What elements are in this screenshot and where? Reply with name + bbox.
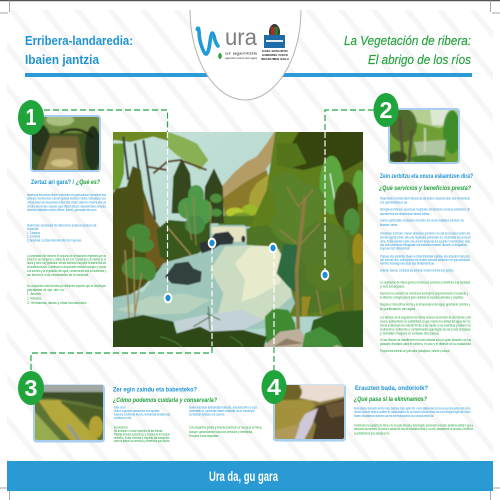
panel 1 body text: Spanish: fauna y flora muy particular, siendo además una parte fundamental del — [27, 261, 106, 265]
panel 1 body text: Spanish: 3. Herbáceas, lianas y otras formaciones. — [27, 301, 87, 305]
panel 2 body text: Spanish: Actúa como barrera natural frente a las riadas y las avenidas y retiene los — [380, 324, 471, 328]
panel 2 body text: Spanish: La vegetación de ribera genera numerosos servicios y beneficios a la sociedad — [380, 280, 470, 284]
left dark tree mass — [110, 166, 167, 303]
panel 1 body text: Spanish: Su composición está formada por diferentes especies que se distribuyen — [27, 284, 106, 288]
panel 2 body text: Basque: ere garrantzitsua da. — [380, 200, 408, 204]
title: Spanish: La Vegetación de ribera: — [344, 33, 471, 48]
panel 2 body text: Spanish: Los efectos de la vegetación de ribera reducen la erosión de las riberas y del — [380, 316, 471, 320]
panel 1 body text: Basque: Ibaiertzeko landaredia hiru faktoreren arabera banatzen da: — [27, 224, 97, 228]
panel 3 heading: ¿Cómo podemos cuidarla y conservarla? — [113, 397, 217, 404]
step badge 1: 1 — [26, 104, 37, 130]
left front tree — [122, 224, 156, 281]
river water — [110, 225, 295, 333]
panel 2 body text: Basque: eta bizidunentzat elikagaiak eta babesa ematen dituzte ur-ibilguetan. — [380, 243, 468, 247]
photo 3: aerial river valley — [33, 383, 105, 443]
panel 1 body text: Basque: 1. Zuhaitzak — [27, 231, 40, 235]
footer band — [7, 461, 493, 491]
icon: government shield: INGURUMEN SAILA — [261, 57, 289, 61]
panel 2 body text: Basque: dute, itzala ematen dute eta uraren tenperatura egonkor mantentzen dute, — [380, 240, 471, 244]
panel 1 heading: ¿Qué es? — [76, 179, 100, 186]
panel 3 body text: left column: Ibaien inguruko landaredia errespetatu. — [114, 409, 160, 413]
panel 4 body text — [354, 406, 473, 436]
panel 2 body text: Basque: Ibaiertzeko landaredia funtsezkoa da ibaien osasunerako eta herrientzat — [380, 196, 470, 200]
step badge 1 — [18, 100, 44, 135]
panel 2 body text: Spanish — [380, 280, 471, 353]
panel 2 body text: Basque: Uholdeen kontrola: uraren abiadura gutxitzen du eta lurzoruari eusten dio, — [380, 232, 471, 236]
panel 1 body text: Spanish: así favorece a las necesidades de la sociedad. — [27, 273, 89, 277]
logo panel — [190, 10, 301, 100]
panel 1 body text: Basque: bizitzeko habitatak sortzen dituzte, ibarrei, gainazalari eta urari. — [27, 208, 97, 212]
panel 3 heading: Zer egin zaindu eta babesteko? — [113, 388, 197, 394]
right forest — [250, 130, 367, 317]
panel 2 body text: Basque: inguruan bizi direnentzat. — [380, 246, 410, 250]
panel 3 body text: right column: Ibaien ertzetan landaredia babestu, kutsadurarik ez egin, — [189, 406, 258, 410]
connector 1 — [44, 110, 172, 304]
panel 3 body text: left column — [114, 406, 170, 443]
panel 3 body text: left column: Recomendaciones: — [114, 426, 128, 430]
title: Spanish — [344, 33, 471, 67]
header rule lines — [25, 73, 472, 77]
panel 1 body text: Basque: 2. Zuhaixkak — [27, 234, 40, 238]
panel 3 body text: right column — [189, 406, 262, 438]
panel 3 heading — [113, 388, 217, 404]
marker dot 4 — [269, 242, 277, 254]
panel 3 body text: left column: ribereño. Evitar vertidos y respetar las márgenes, — [114, 436, 170, 440]
panel 4 heading: Erauzten bada, ondorioik? — [355, 385, 428, 392]
connector 2 — [321, 110, 374, 280]
logo tagline: agencia vasca del agua — [225, 56, 257, 60]
icon: ura water squiggle — [196, 26, 218, 54]
panel 2 body text: Basque: Paisaia eta aisialdia: ibaien ertzak ibilaldiak egiteko eta atseden hartzeko — [380, 254, 470, 258]
middle green tree — [178, 185, 213, 234]
step badge 2: 2 — [380, 97, 392, 123]
panel 3 body text: left column: Espezie exotikoak kendu, bertakoak landatu eta — [114, 412, 170, 416]
panel 4 heading: ¿Qué pasa si la eliminamos? — [354, 396, 427, 403]
panel 2 body text: Spanish: cauce, aumentando su estabilidad, lo que mejora la calidad del agua del río. — [380, 320, 471, 324]
panel 1 body text: Spanish: 1. Árboles — [27, 292, 41, 296]
panel 2 body text: Basque: ertzak egonkortzen ditu eta higadura saihesten du. Sustraiek lurra lotzen — [380, 236, 471, 240]
marker dot 2 — [321, 270, 329, 280]
panel 2 body text: Spanish: paisajes fluviales para el turismo, el ocio y el disfrute de la ciudadanía — [380, 342, 471, 346]
far hills — [222, 130, 277, 202]
panel 3 body text: left column: para no alterar los servicios y beneficios que aporta. — [114, 439, 170, 443]
title: Basque: Erribera-landaredia: — [25, 33, 133, 48]
panel 4 heading — [354, 385, 428, 403]
panel 3 body text: right column: bosque, garantizando todos los servicios y beneficios. — [189, 430, 253, 434]
photo 4: eroded riverbank — [272, 382, 347, 443]
marker dot 3 — [208, 238, 216, 248]
panel 2 body text: Spanish: Proporciona además un gran valor paisajístico, natural y cultural. — [380, 349, 450, 353]
panel 3 body text: left column: Ibaiak zaindu: — [114, 406, 126, 410]
panel 2 body text: Basque: faunarentzat eta florarentzat hainbat tokitan. — [380, 212, 430, 216]
lime bushes — [218, 204, 258, 228]
panel 2 body text: Spanish: y los bosques: — [380, 284, 405, 288]
photo 2: riverside trees — [388, 108, 461, 164]
panel 2 body text: Basque: Azkenik, basoak, zuhaitzak eta belarrak ondare komuna dira guztion. — [380, 268, 454, 272]
panel 1 body text: Basque: ondare baten eta ekosistema baten dira. Ibaien sistemen oinarria dira eta — [27, 200, 106, 204]
panel 2 heading — [379, 174, 473, 192]
panel 1 body text: Spanish: La vegetación de ribera es el conjunto de formaciones vegetales que se — [27, 254, 106, 258]
step badge 4 — [262, 370, 286, 404]
panel 1 body text: Spanish: paralelas al eje del río: — [27, 288, 65, 292]
big central tree — [247, 225, 353, 317]
cypress trees — [172, 158, 193, 213]
foreground right bushes — [310, 310, 363, 347]
panel 1 body text: Basque: espeziak: — [27, 227, 39, 231]
panel 1 heading: Zertaz ari gara? / — [31, 179, 74, 186]
panel 4 body text: ecosistémicos que presta el río. — [354, 432, 390, 436]
icon: government shield — [261, 24, 289, 61]
panel 2 body text: Spanish: Favorece la conexión de corredores ecológicos proporcionando el sustento y — [380, 292, 468, 296]
panel 2 body text: Spanish: Si las riberas se mantienen en buen estado son un gran atractivo de los — [380, 338, 471, 342]
panel 3 body text: right column: Con pequeños gestos y buenas prácticas se recupera la ribera, — [189, 426, 262, 430]
panel 1 body text: Basque: uretako eta lurreko espezie ugari biltzen dituzte. Basoak babes emanez — [27, 204, 106, 208]
panel 1 body text: Basque: zeinetan, ibai ibarrean, basoen guneak hedatzen baitira. Eskualdean oso — [27, 197, 106, 201]
panel 1 body text: Spanish: a la sombra y la regulación del agua, conservando sus ecosistemas y — [27, 269, 106, 273]
panel 1 body text: Basque: Ibaiertzak eskuinean ibaien inskribako eta gainazaleko lurraldeak dira — [27, 193, 106, 197]
marker dot 1 — [164, 292, 172, 304]
panel 2 body text: Spanish: sedimentos, nutrientes y contaminantes que llegan de las zonas cercanas. — [380, 328, 471, 332]
title: Basque — [25, 33, 133, 67]
panel 2 body text: Spanish: Regula el microclima del río y la temperatura del agua, aportando sombra y — [380, 302, 470, 306]
panel 2 body text: Basque: toki ederrak dira, baita kultura eta ondare naturala zaintzeko ere garrantzitsuak — [380, 258, 470, 262]
panel 2 body text: Basque: ibaietan zehar. — [380, 223, 398, 227]
panel 2 heading: Zein zerbitzu eta onura eskaintzen dira? — [380, 174, 473, 180]
panel 2 body text: Basque: Biologia-korridorea: espezieak mugitzeko eta bizitzeko eremua eskaintzen du — [380, 208, 470, 212]
icon: government shield: EUSKO JAURLARITZA — [262, 49, 288, 53]
title: Spanish: El abrigo de los ríos — [368, 52, 471, 67]
panel 2 body text: Spanish: la purificación del agua. — [380, 307, 416, 311]
panel 2 body text: Basque — [380, 196, 471, 272]
panel 3 body text: right column: Recuperar zonas degradadas. — [189, 434, 219, 438]
left top canopy — [113, 132, 168, 142]
panel 1 body text: Spanish — [27, 254, 106, 305]
step badge 3: 3 — [24, 375, 38, 401]
ground under middle trees — [157, 220, 210, 262]
logo wordmark: ura — [225, 24, 257, 50]
step badge 3 — [18, 371, 44, 405]
central river illustration — [110, 130, 367, 350]
logo tagline: ur agentzia — [225, 52, 259, 56]
panel 3 body text: right column: Zuhaitzak landatu eta zaindu. — [189, 412, 225, 416]
photo 1: forest river — [30, 114, 102, 172]
footer slogan: Ura da, gu gara — [209, 468, 278, 484]
panel 1 body text: Spanish: 2. Arbustos — [27, 296, 41, 300]
title: Basque: Ibaien jantzia — [25, 52, 100, 67]
logo tagline — [218, 52, 259, 60]
panel 3 body text: left column: zaintzea lortu. — [114, 416, 132, 420]
panel 3 body text: left column: No arrancar ni cortar especies de las riberas. — [114, 429, 163, 433]
panel 2 body text: Basque: Uraren garbitzailea: kutsadura murrizten eta uraren kalitatea hobetzen du — [380, 218, 464, 222]
panel 2 body text: Spanish: y también mejora el estado del cauce. — [380, 332, 440, 336]
panel 1 body text: Basque: 3. Belarkiak. Guztiak elkarrekin bizi dira inguruan. — [27, 238, 82, 242]
panel 2 body text: Basque: herriko bizilagunentzat eta bisitarientzat. — [380, 262, 435, 266]
panel 2 body text: Spanish: el alimento y refugio para la gran variedad de especies animales y vegetales. — [380, 296, 464, 300]
panel 3 body text: left column: Plantar árboles autóctonos y conservar el bosque — [114, 432, 170, 436]
panel 1 body text: Basque — [27, 193, 106, 242]
connector 4 — [269, 242, 277, 371]
panel 4 body text: Ibaien ekosistema kaltetzen da eta berreskuratzeko lan handia behar da. — [354, 414, 434, 418]
river rocks — [165, 262, 202, 285]
foreground left bushes — [110, 315, 267, 350]
panel 2 heading: ¿Qué servicios y beneficios presta? — [379, 185, 471, 192]
panel 1 body text: Spanish: sitúan en las márgenes y orillas de los ríos. Constituyen un hábitat de la — [27, 258, 106, 262]
step badge 2 — [374, 93, 398, 127]
step badge 4: 4 — [267, 374, 281, 400]
panel 3 body text: right column: isurketarik ez, jarduerak ibaien ertzetatik urrun mantendu. — [189, 409, 255, 413]
connector 3 — [31, 238, 216, 372]
panel 1 body text: Spanish: ecosistema fluvial. Constituye un importante corredor biológico y ayuda — [27, 265, 106, 269]
icon: government shield: GOBIERNO VASCO — [262, 53, 289, 57]
